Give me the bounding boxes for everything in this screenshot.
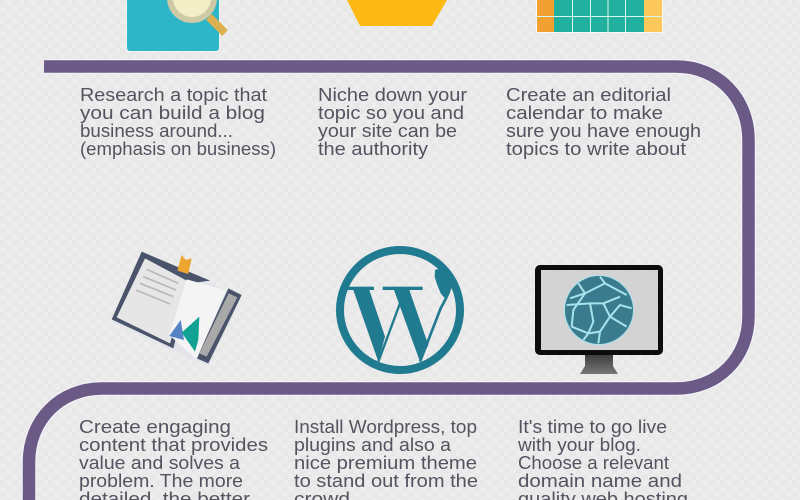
text: install WordPress step: Install Wordpress, top (294, 416, 477, 437)
text: niche step: Niche down your (318, 84, 467, 105)
text: niche step: your site can be (318, 120, 457, 141)
text: calendar step: sure you have enough (506, 120, 701, 141)
text: calendar step: Create an editorial (506, 84, 671, 105)
text: research step: business around... (80, 120, 233, 141)
winding purple timeline path (29, 66, 748, 500)
text: niche step: topic so you and (318, 102, 464, 123)
icon: yellow hexagon (347, 0, 447, 26)
text: calendar step: topics to write about (506, 138, 686, 159)
icon: editorial calendar (536, 0, 663, 33)
icon: monitor with globe (535, 265, 663, 374)
text: create content step: problem. The more (79, 470, 243, 491)
text: niche step (318, 84, 467, 159)
text: install WordPress step: nice premium theme (294, 452, 477, 473)
text: research step: Research a topic that (80, 84, 267, 105)
icon: open book (112, 252, 242, 366)
text: calendar step: calendar to make (506, 102, 663, 123)
text: research step (80, 84, 276, 159)
text: create content step: value and solves a (79, 452, 241, 473)
text: go live step (517, 416, 688, 500)
text: research step: you can build a blog (80, 102, 265, 123)
text: install WordPress step (294, 416, 478, 500)
text: create content step: Create engaging (79, 416, 231, 437)
text: go live step: with your blog. (517, 434, 641, 455)
icon: magnifier on teal tile (126, 0, 225, 52)
text: niche step: the authority (318, 138, 429, 159)
icon: WordPress logo (340, 250, 460, 370)
text: go live step: It's time to go live (518, 416, 667, 437)
text: install WordPress step: plugins and also a (294, 434, 452, 455)
text: go live step: Choose a relevant (518, 452, 669, 473)
text: go live step: domain name and (518, 470, 682, 491)
text: research step: (emphasis on business) (80, 138, 276, 159)
text: create content step (79, 416, 268, 500)
text: create content step: content that provides (79, 434, 268, 455)
text: install WordPress step: to stand out from the (294, 470, 478, 491)
text: calendar step (506, 84, 701, 159)
